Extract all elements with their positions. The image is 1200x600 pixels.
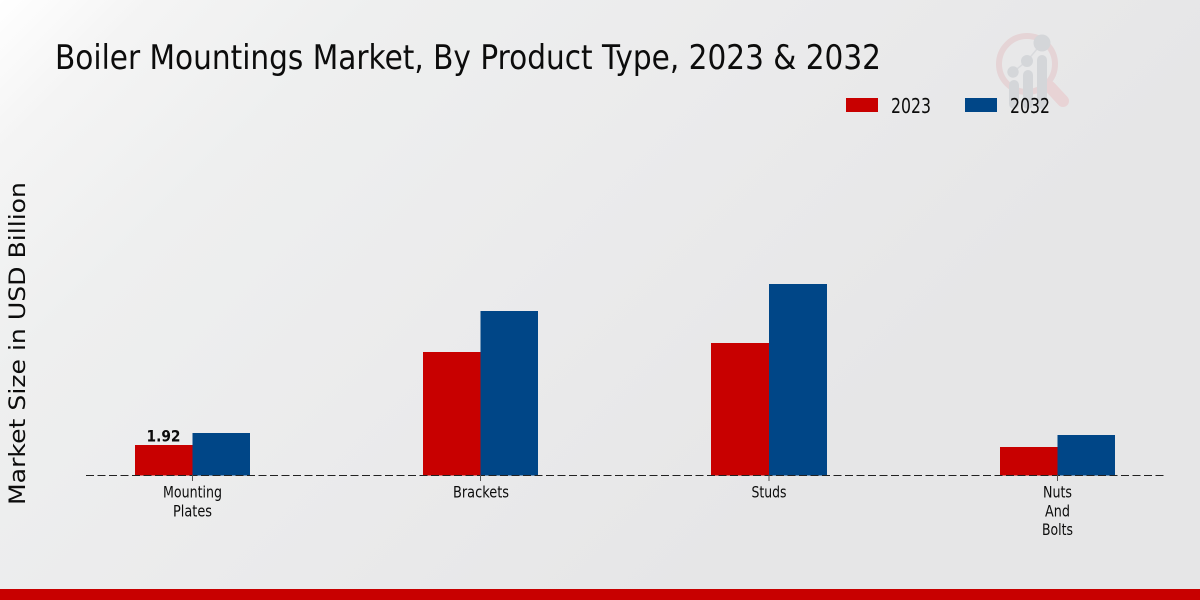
bars: Studs — [711, 284, 827, 476]
category label: Mounting Plates: Plates — [173, 502, 212, 520]
bottom red band — [0, 589, 1200, 600]
value label 1.92: 1.92 — [146, 426, 180, 446]
category label: Brackets: Brackets — [453, 482, 509, 502]
category label: Nuts And Bolts: And — [1045, 502, 1070, 520]
axis ticks — [192, 475, 1058, 481]
legend label 2032: 2032 — [1010, 94, 1050, 118]
bars: Mounting Plates — [135, 433, 250, 476]
legend — [846, 94, 1050, 118]
title: Boiler Mountings Market, By Product Type, 2023 & 2032 — [55, 38, 881, 78]
watermark logo icon — [999, 34, 1063, 109]
legend label 2023: 2023 — [891, 94, 931, 118]
category label: Nuts And Bolts — [1042, 482, 1073, 539]
bars: Nuts And Bolts — [1000, 435, 1115, 476]
category label: Nuts And Bolts: Bolts — [1042, 520, 1073, 539]
category label: Nuts And Bolts: Nuts — [1043, 482, 1072, 502]
bars: Brackets — [423, 311, 538, 476]
category label: Mounting Plates: Mounting — [163, 482, 222, 502]
y axis title: Market Size in USD Billion — [5, 182, 31, 505]
legend swatch 2023 — [846, 98, 878, 112]
category label: Studs: Studs — [752, 482, 786, 502]
x axis baseline — [86, 474, 1164, 476]
bar chart — [86, 284, 1164, 481]
category label: Mounting Plates — [163, 482, 222, 520]
legend swatch 2032 — [965, 98, 997, 112]
